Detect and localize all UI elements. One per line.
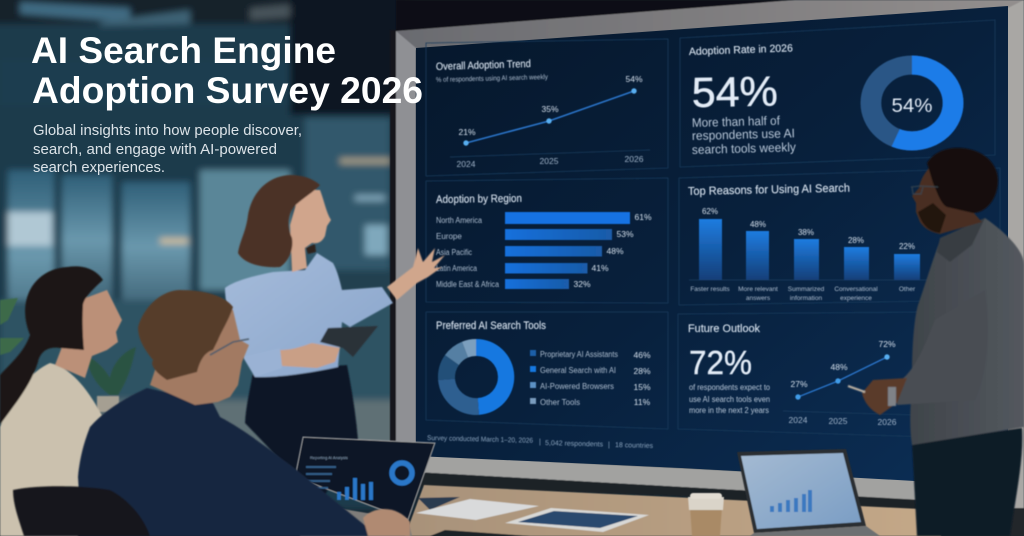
heading: overall adoption trend: Overall Adoption Trend — [436, 58, 531, 73]
bar chart: reasons: experience — [840, 295, 872, 302]
panel: overall adoption trend — [426, 39, 668, 176]
bar chart: reasons: information — [790, 295, 822, 302]
bar chart: region: 48% — [606, 246, 624, 256]
laptop: foreground — [290, 437, 435, 536]
line chart: adoption trend — [450, 74, 650, 169]
line chart: adoption trend: 2026 — [625, 154, 644, 164]
collar — [937, 218, 985, 262]
survey footer: Survey conducted March 1–20, 2026 — [427, 435, 533, 445]
title — [31, 29, 423, 111]
bar chart: region: Middle East & Africa — [436, 280, 499, 289]
face — [290, 190, 331, 272]
legend: tools: 15% — [633, 382, 651, 392]
bar chart: region: 41% — [591, 263, 609, 273]
heading: future outlook: Future Outlook — [688, 323, 760, 335]
bar chart: reasons: More relevant — [738, 286, 778, 293]
beard — [918, 203, 946, 233]
description: more than half: More than half of — [692, 114, 781, 130]
bar chart: reasons: 22% — [899, 242, 915, 251]
survey footer: 5,042 respondents — [545, 440, 604, 449]
heading: adoption by region: Adoption by Region — [436, 193, 522, 206]
bar chart: reasons: 62% — [702, 207, 718, 216]
donut chart: 54 percent — [871, 65, 953, 141]
survey footer: | — [539, 439, 541, 446]
office background with windows — [0, 0, 410, 510]
chair — [13, 486, 150, 536]
conference table — [405, 485, 941, 536]
arm and hand — [387, 248, 445, 300]
hand on keyboard — [363, 509, 410, 536]
trousers — [245, 365, 358, 536]
line chart: adoption trend: 35% — [541, 104, 559, 114]
panel: adoption rate in 2026 — [680, 20, 995, 167]
bar chart: region: 61% — [634, 212, 652, 222]
legend: tools: 46% — [633, 350, 651, 360]
bar chart: region: 32% — [573, 279, 591, 289]
bar chart: reasons: Other — [899, 286, 916, 293]
face and neck — [150, 305, 249, 405]
phone — [848, 386, 865, 392]
legend: tools: 28% — [633, 366, 651, 376]
legend: tools: General Search with AI — [540, 366, 616, 375]
glasses — [210, 339, 249, 355]
description: more than half: respondents use AI — [692, 126, 795, 143]
line chart: adoption trend: 2024 — [457, 159, 476, 169]
donut chart: tools — [438, 339, 514, 415]
subtitle: search, and engage with AI-powered — [33, 141, 277, 158]
heading: adoption rate: Adoption Rate in 2026 — [689, 42, 793, 58]
legend: tools: AI-Powered Browsers — [540, 382, 614, 391]
bar chart: region: Latin America — [436, 264, 477, 273]
heading: preferred tools: Preferred AI Search Tools — [436, 320, 546, 332]
sweater — [78, 388, 394, 536]
seated woman — [0, 266, 122, 536]
line chart: future outlook — [783, 339, 915, 427]
bar chart: reasons: 28% — [848, 236, 864, 245]
bar chart: region — [436, 212, 652, 289]
survey footer: 18 countries — [615, 442, 654, 450]
papers on table — [416, 497, 539, 520]
printed chart on table — [505, 508, 649, 532]
subtitle: Global insights into how people discover, — [33, 122, 302, 139]
potted plant — [0, 298, 136, 412]
description: more than half: search tools weekly — [692, 140, 797, 157]
laptop chart bars — [337, 478, 373, 500]
face and neck — [912, 163, 982, 234]
subheading: respondents: % of respondents using AI search weekly — [436, 74, 548, 84]
hair — [138, 290, 233, 380]
bar chart: reasons: Faster results — [690, 286, 730, 293]
bar chart: reasons: answers — [746, 295, 771, 302]
line chart: future outlook: 48% — [830, 362, 848, 372]
laptop: right — [737, 449, 880, 536]
bar chart: reasons: Summarized — [788, 286, 825, 293]
survey footer — [427, 435, 654, 450]
hair — [238, 175, 320, 267]
panel: adoption by region — [426, 178, 668, 303]
subtitle: search experiences. — [33, 159, 165, 176]
dashboard screen — [416, 6, 1008, 490]
bar chart: reasons — [689, 207, 930, 302]
presenter woman — [225, 175, 445, 536]
line chart: future outlook: 72% — [878, 339, 896, 349]
sleeve — [897, 290, 988, 405]
panel: preferred AI search tools — [426, 312, 668, 429]
line chart: future outlook: 2024 — [789, 415, 808, 425]
legend: tools — [530, 350, 651, 407]
description: respondents expect: of respondents expect to — [689, 383, 770, 392]
bar chart: reasons: Conversational — [834, 286, 878, 293]
survey footer: | — [608, 442, 610, 449]
bar chart: region: Europe — [436, 232, 462, 241]
bar chart: region: Asia Pacific — [436, 248, 472, 257]
laptop: foreground: Reporting AI Analysis — [310, 455, 348, 460]
laptop bar chart — [770, 490, 812, 512]
shirt cuff — [243, 348, 282, 377]
sweater — [910, 218, 1024, 445]
line chart: adoption trend: 21% — [458, 127, 476, 137]
description: more than half — [692, 114, 797, 157]
description: respondents expect: more in the next 2 years — [689, 406, 769, 415]
laptop donut — [392, 463, 412, 483]
bar chart: region: North America — [436, 216, 482, 225]
title: AI Search Engine — [31, 29, 336, 71]
description: respondents expect: use AI search tools even — [689, 395, 770, 404]
watch — [888, 387, 896, 406]
line chart: future outlook: 2026 — [878, 417, 897, 427]
line chart: adoption trend: 54% — [625, 74, 643, 84]
description: respondents expect — [689, 383, 770, 415]
heading: top reasons: Top Reasons for Using AI Search — [688, 183, 850, 198]
stat: 72 percent: 72% — [689, 344, 752, 381]
trousers — [912, 428, 1022, 536]
hair — [927, 148, 998, 213]
title: Adoption Survey 2026 — [32, 69, 423, 111]
bar chart: region: 53% — [616, 229, 634, 239]
stat: 54 percent: 54% — [691, 68, 778, 116]
glasses — [911, 186, 938, 194]
bar chart: reasons: 38% — [798, 228, 814, 237]
standing man — [848, 148, 1024, 536]
bar chart: reasons: 48% — [750, 220, 766, 229]
hands — [862, 378, 907, 415]
line chart: future outlook: 2025 — [829, 416, 848, 426]
line chart: future outlook: 27% — [790, 379, 808, 389]
donut chart: 54 percent: 54% — [892, 96, 933, 117]
legend: tools: Proprietary AI Assistants — [540, 350, 618, 359]
line chart: adoption trend: 2025 — [540, 156, 559, 166]
seated man — [13, 290, 410, 536]
panel: top reasons — [679, 168, 1000, 305]
panel: future outlook — [678, 312, 930, 437]
shirt — [225, 253, 393, 377]
tablet — [320, 326, 378, 357]
legend: tools: Other Tools — [540, 398, 580, 407]
legend: tools: 11% — [634, 397, 651, 407]
coffee cup — [688, 493, 724, 536]
subtitle — [33, 122, 302, 176]
display frame and wall — [390, 0, 1024, 536]
